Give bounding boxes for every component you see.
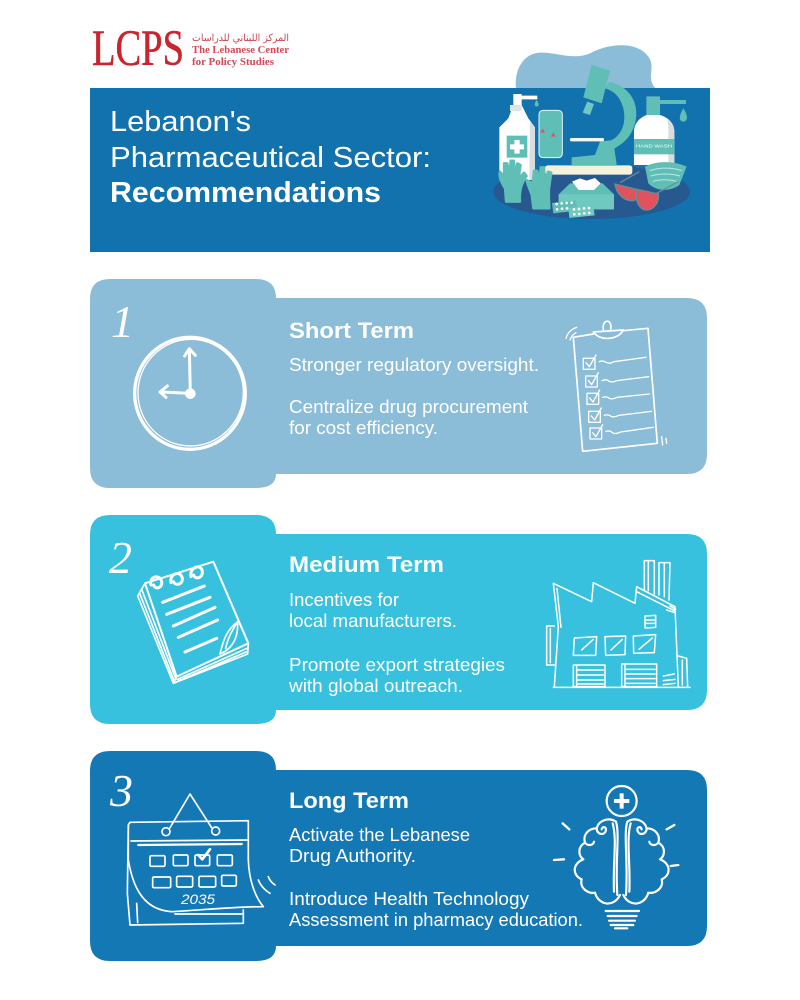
- heading: medium term: Medium Term: [289, 552, 444, 577]
- icon: microscope: [545, 65, 636, 175]
- icon: notepad: [138, 562, 248, 683]
- illustration: medical supplies: [493, 65, 690, 219]
- title: Lebanon's: [110, 106, 251, 138]
- icon: gloves: [499, 161, 551, 208]
- text: medium term recommendations: [288, 590, 505, 696]
- logo: LCPS: LCPS: [92, 21, 184, 77]
- title: Pharmaceutical Sector:: [110, 142, 431, 174]
- icon: safety glasses: [615, 172, 678, 210]
- icon: face mask: [645, 162, 687, 190]
- text: medium term recommendations: local manufacturers.: [289, 611, 457, 631]
- icon: factory: [547, 561, 690, 687]
- text: medium term recommendations: Promote export strategies: [289, 655, 505, 675]
- icon: tissue box: [559, 178, 614, 209]
- icon: sanitizer bottle: [499, 94, 539, 180]
- text: long term recommendations: Assessment in pharmacy education.: [289, 910, 583, 930]
- icon: calendar: 2035: [180, 891, 215, 907]
- panel 3: long term: [90, 751, 707, 961]
- text: short term recommendations: Centralize drug procurement: [289, 397, 528, 417]
- number 3: 3: [109, 765, 133, 816]
- text: short term recommendations: Stronger regulatory oversight.: [289, 355, 539, 375]
- icon: pill blisters: [552, 200, 595, 218]
- logo: LCPS: المركز اللبناني للدراسات: [192, 33, 289, 44]
- text: short term recommendations: [289, 355, 539, 438]
- text: long term recommendations: Activate the Lebanese: [289, 825, 470, 845]
- icon: clock: [128, 330, 253, 456]
- icon: clipboard checklist: [566, 321, 667, 451]
- header banner: [90, 88, 710, 252]
- icon: calendar: [127, 794, 275, 925]
- panel 2: medium term: [90, 515, 707, 724]
- logo: LCPS: [92, 21, 289, 77]
- icon: hand wash bottle: HAND WASH: [636, 144, 672, 150]
- icon: test phone panel: [539, 110, 562, 158]
- heading: long term: Long Term: [289, 788, 409, 813]
- text: long term recommendations: Introduce Health Technology: [289, 889, 529, 909]
- text: long term recommendations: Drug Authority.: [289, 846, 416, 866]
- number 1: 1: [111, 296, 134, 347]
- text: medium term recommendations: with global outreach.: [288, 676, 463, 696]
- logo: LCPS: for Policy Studies: [192, 57, 274, 68]
- decorative blob behind illustration: [516, 45, 656, 89]
- title: Recommendations: [110, 177, 381, 209]
- title: [110, 106, 431, 209]
- icon: hand wash bottle: [634, 97, 687, 165]
- number 2: 2: [109, 532, 132, 583]
- heading: short term: Short Term: [289, 318, 414, 343]
- text: long term recommendations: [289, 825, 583, 930]
- text: short term recommendations: for cost efficiency.: [289, 418, 438, 438]
- logo: LCPS: The Lebanese Center: [192, 45, 289, 56]
- icon: brain light bulb: [554, 786, 678, 928]
- text: medium term recommendations: Incentives for: [289, 590, 399, 610]
- panel 1: short term: [90, 279, 707, 488]
